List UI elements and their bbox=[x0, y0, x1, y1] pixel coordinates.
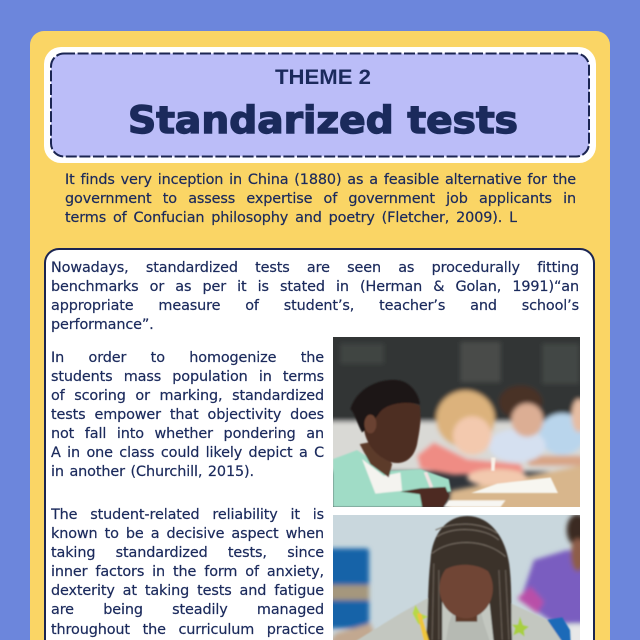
text block: introduction: government to assess expertise of government job applicants in bbox=[65, 191, 576, 207]
text block: homogenize paragraph: A in one class could likely depict a C bbox=[51, 445, 324, 461]
text block: opening paragraph: appropriate measure of student’s, teacher’s and school’s bbox=[51, 298, 579, 314]
text block: introduction: It finds very inception in China (1880) as a feasible alternative for the bbox=[65, 172, 576, 188]
text block: opening paragraph: Nowadays, standardized tests are seen as procedurally fitting bbox=[51, 260, 579, 276]
header: dashed lilac box bbox=[50, 52, 590, 158]
text block: homogenize paragraph: not fall into whether pondering an bbox=[51, 426, 324, 442]
text block: reliability paragraph: inner factors in the form of anxiety, bbox=[51, 564, 324, 580]
text block: reliability paragraph: known to be a decisive aspect when bbox=[51, 526, 324, 542]
photo: girl with braids working at desk bbox=[333, 515, 580, 640]
heading: title: Standarized tests bbox=[128, 99, 518, 142]
photo: children writing in classroom bbox=[333, 337, 580, 507]
text block: opening paragraph: benchmarks or as per it is stated in (Herman & Golan, 1991)“an bbox=[51, 279, 579, 295]
text block: homogenize paragraph: in another (Churchill, 2015). bbox=[51, 464, 254, 480]
text block: reliability paragraph: taking standardized tests, since bbox=[51, 545, 324, 561]
text block: homogenize paragraph: In order to homogenize the bbox=[51, 350, 324, 366]
text block: introduction: terms of Confucian philosophy and poetry (Fletcher, 2009). L bbox=[65, 210, 517, 226]
text block: reliability paragraph: The student-related reliability it is bbox=[51, 507, 324, 523]
text block: reliability paragraph: throughout the curriculum practice bbox=[51, 622, 324, 638]
text block: reliability paragraph: dexterity at taking tests and fatigue bbox=[51, 583, 324, 599]
text block: opening paragraph: performance”. bbox=[51, 317, 154, 333]
header panel bbox=[44, 47, 596, 163]
text block: introduction bbox=[65, 172, 576, 226]
panel: white content card bbox=[44, 248, 595, 640]
text block: opening paragraph bbox=[51, 260, 579, 333]
text block: homogenize paragraph: students mass population in terms bbox=[51, 369, 324, 385]
text block: reliability paragraph: are being steadily managed bbox=[51, 602, 324, 618]
text block: reliability paragraph bbox=[51, 507, 324, 638]
text block: homogenize paragraph: tests empower that objectivity does bbox=[51, 407, 324, 423]
text block: homogenize paragraph: of scoring or marking, standardized bbox=[51, 388, 324, 404]
text block: homogenize paragraph bbox=[51, 350, 324, 480]
heading: theme label: THEME 2 bbox=[275, 65, 371, 89]
